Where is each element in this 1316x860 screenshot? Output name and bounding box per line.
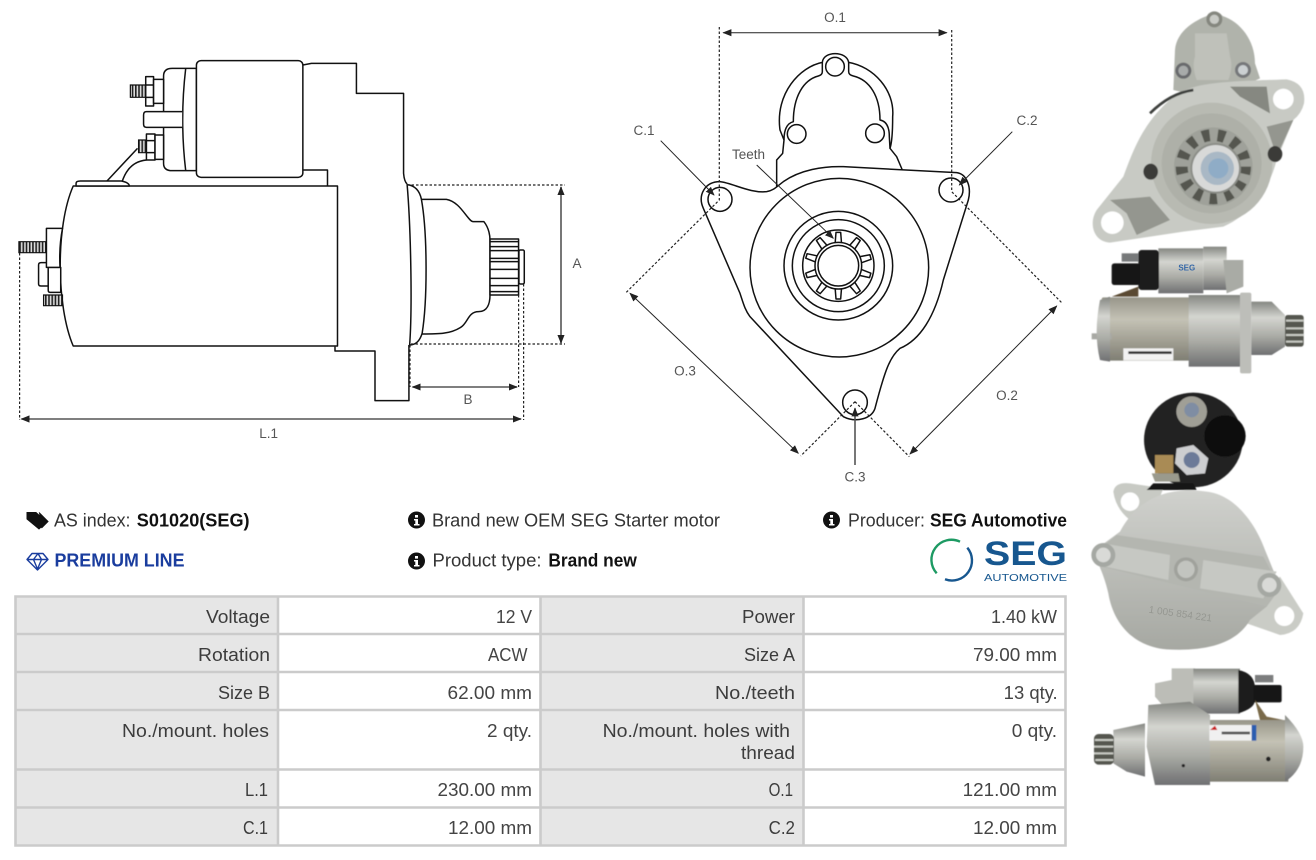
pinion [490, 239, 524, 295]
info: product type: Product type: [432, 551, 542, 571]
solenoid cap [164, 68, 196, 171]
label O.3: O.3 [674, 364, 696, 379]
row: size B / teeth: 13 qty. [1004, 683, 1058, 703]
nose [421, 199, 490, 334]
specification table [15, 596, 1066, 846]
row: voltage / power: 1.40 kW [991, 607, 1057, 627]
row: size B / teeth: 62.00 mm [448, 683, 532, 703]
row: L.1 / O.1: 121.00 mm [963, 780, 1057, 800]
photo: starter front [1093, 11, 1304, 243]
row: rotation / size A: 79.00 mm [973, 645, 1057, 665]
label C.1: C.1 [633, 123, 655, 138]
row: C.1 / C.2 [243, 818, 1057, 838]
icon: info [823, 512, 840, 528]
dimension lines side view [20, 185, 565, 420]
info: product type [408, 551, 638, 571]
lower terminal [139, 134, 164, 160]
solenoid [196, 61, 303, 177]
logo: SEG Automotive: AUTOMOTIVE [984, 573, 1067, 584]
label O.1: O.1 [824, 10, 846, 25]
row: mounting holes [122, 721, 1057, 763]
photo text: SEG on solenoid: SEG [1178, 263, 1195, 272]
info: brand new OEM: Brand new OEM SEG Starter motor [432, 511, 720, 531]
blade terminal [144, 112, 182, 127]
row: mounting holes: No./mount. holes with [603, 721, 790, 741]
label A: A [572, 256, 582, 271]
row: mounting holes: No./mount. holes [122, 721, 269, 741]
icon: info [408, 512, 425, 528]
premium line badge: PREMIUM LINE [54, 551, 184, 571]
photo: starter side [1092, 247, 1304, 373]
icon: diamond [27, 554, 48, 570]
row: L.1 / O.1 [245, 780, 1057, 800]
label B: B [463, 392, 473, 407]
pinion teeth [805, 232, 871, 299]
row: L.1 / O.1: O.1 [769, 780, 793, 800]
row: rotation / size A: ACW [488, 645, 528, 665]
logo: SEG Automotive [931, 535, 1067, 584]
info row: AS index: S01020(SEG) [137, 511, 250, 531]
info row: AS index: AS index: [54, 511, 130, 531]
row: C.1 / C.2: 12.00 mm [448, 818, 532, 838]
row: voltage / power [206, 607, 1057, 627]
solenoid back outline [777, 54, 902, 187]
row: size B / teeth: No./teeth [715, 683, 795, 703]
row: L.1 / O.1: L.1 [245, 780, 268, 800]
lower mount [335, 345, 409, 401]
side view drawing [19, 61, 582, 441]
photo: starter left side [1094, 668, 1303, 785]
row: size B / teeth: Size B [218, 683, 270, 703]
front view drawing [625, 10, 1062, 485]
mounting holes [708, 178, 963, 415]
icon: info [408, 552, 425, 570]
motor body [60, 186, 337, 346]
row: C.1 / C.2: C.1 [243, 818, 268, 838]
row: rotation / size A: Rotation [198, 645, 270, 665]
flange [407, 185, 426, 345]
row: C.1 / C.2: C.2 [769, 818, 795, 838]
info row: AS index [27, 511, 250, 531]
flange outline [701, 167, 969, 420]
housing rings [750, 178, 929, 357]
table cell backgrounds [15, 596, 1066, 846]
info: producer: SEG Automotive [930, 511, 1067, 531]
row: rotation / size A [198, 645, 1057, 665]
logo: SEG Automotive: SEG [984, 535, 1067, 573]
wire [106, 148, 146, 182]
dimension lines front view [625, 27, 1062, 465]
info: producer: Producer: [848, 511, 925, 531]
row: voltage / power: 12 V [496, 607, 532, 627]
info: producer [823, 511, 1067, 531]
row: mounting holes: 0 qty. [1012, 721, 1057, 741]
label L.1: L.1 [259, 426, 278, 441]
label Teeth: Teeth [732, 147, 765, 162]
row: mounting holes: 2 qty. [487, 721, 532, 741]
row: rotation / size A: Size A [744, 645, 795, 665]
icon: tags [27, 512, 48, 529]
row: mounting holes: thread [741, 743, 795, 763]
label C.3: C.3 [844, 470, 866, 485]
row: size B / teeth [218, 683, 1058, 703]
row: C.1 / C.2: 12.00 mm [973, 818, 1057, 838]
screw holes [787, 57, 884, 143]
rear studs [19, 228, 62, 306]
row: voltage / power: Voltage [206, 607, 270, 627]
row: voltage / power: Power [742, 607, 795, 627]
drive housing [303, 63, 407, 184]
label O.2: O.2 [996, 388, 1018, 403]
photo text: part number: 1 005 854 221 [1148, 605, 1213, 625]
row: L.1 / O.1: 230.00 mm [438, 780, 532, 800]
info: product type: Brand new [548, 551, 638, 571]
photo: starter rear [1091, 393, 1303, 650]
top terminal [130, 77, 164, 106]
label C.2: C.2 [1016, 113, 1038, 128]
